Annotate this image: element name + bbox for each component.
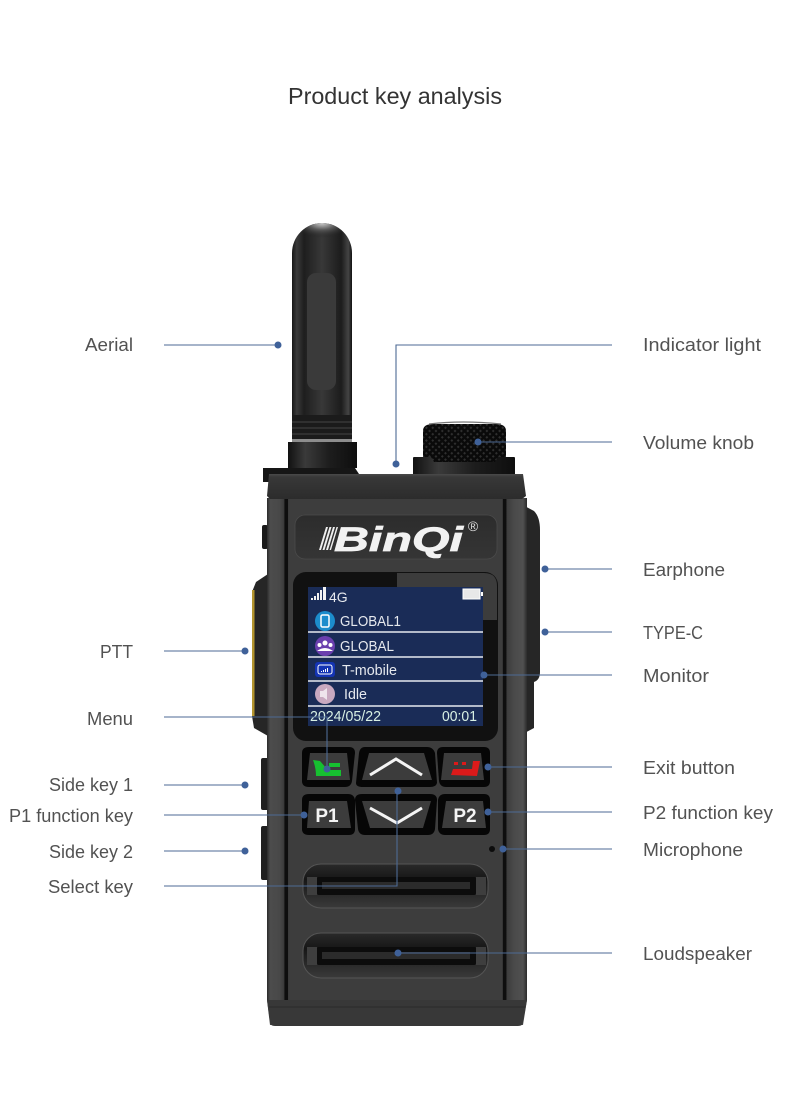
logo plate: ® — [468, 518, 479, 534]
row: GLOBAL — [315, 636, 394, 656]
callout: Loudspeaker: Loudspeaker — [643, 944, 752, 964]
callout: Select key: Select key — [48, 877, 133, 897]
callout: Microphone: Microphone — [643, 840, 743, 860]
callout: Side key 1: Side key 1 — [49, 775, 133, 795]
callout: Volume knob: Volume knob — [643, 433, 754, 453]
callout: Exit button — [484, 758, 735, 778]
callout: Select key — [48, 788, 402, 897]
callout: P2 function key — [484, 803, 773, 823]
bottom cap — [267, 1000, 527, 1026]
body — [267, 498, 527, 1025]
P1 key: P1 — [315, 806, 339, 827]
row: GLOBAL: GLOBAL — [340, 639, 394, 655]
callout: TYPE-C: TYPE-C — [643, 623, 703, 643]
callout: P2 function key: P2 function key — [643, 803, 773, 823]
callout: Menu — [87, 709, 330, 772]
status bar — [311, 587, 483, 605]
down key — [355, 794, 437, 835]
row: T-mobile: T-mobile — [342, 663, 397, 679]
row: Idle: Idle — [344, 687, 367, 703]
callout: Earphone — [542, 560, 725, 580]
microphone hole — [489, 846, 495, 852]
keypad — [302, 747, 490, 835]
callout: Loudspeaker — [394, 944, 752, 964]
callout: TYPE-C — [542, 623, 703, 643]
lower speaker slot — [303, 933, 488, 978]
callout: PTT: PTT — [100, 642, 133, 662]
status bar: 4G — [329, 589, 348, 605]
green call key — [302, 747, 355, 787]
right side cover — [519, 503, 540, 736]
date and time — [310, 709, 477, 725]
top cap — [267, 474, 526, 499]
aerial — [263, 223, 359, 482]
callout: Aerial — [85, 335, 282, 355]
row: Idle — [315, 684, 367, 704]
callout: Earphone: Earphone — [643, 560, 725, 580]
callout: Side key 1 — [49, 775, 248, 795]
P2 key — [438, 794, 490, 835]
callout: Volume knob — [474, 433, 754, 453]
callout: Side key 2: Side key 2 — [49, 842, 133, 862]
callout: Exit button: Exit button — [643, 758, 735, 778]
logo plate — [295, 515, 497, 559]
P2 key: P2 — [453, 806, 477, 827]
row: GLOBAL1: GLOBAL1 — [340, 614, 401, 630]
title: Product key analysis — [288, 83, 502, 109]
callout: Side key 2 — [49, 842, 248, 862]
side keys 1 and 2 — [261, 758, 269, 880]
upper speaker slot — [303, 864, 488, 908]
PTT side key — [252, 525, 268, 736]
callout: Monitor: Monitor — [643, 666, 709, 686]
callout: Indicator light: Indicator light — [643, 335, 761, 355]
callout: Indicator light — [392, 335, 761, 468]
brand name: BinQi — [334, 521, 465, 559]
callout: Microphone — [500, 840, 743, 860]
radio product illustration — [252, 223, 540, 1026]
monitor screen — [293, 572, 498, 741]
row: GLOBAL1 — [315, 611, 401, 631]
callout: P1 function key — [9, 806, 308, 826]
callout: P1 function key: P1 function key — [9, 806, 133, 826]
row: T-mobile — [315, 662, 397, 679]
date and time: 2024/05/22 — [310, 709, 381, 725]
volume knob — [413, 422, 515, 475]
date and time: 00:01 — [442, 709, 477, 725]
callout: Menu: Menu — [87, 709, 133, 729]
callout: PTT — [100, 642, 248, 662]
callout: Monitor — [480, 666, 709, 686]
P1 key — [302, 794, 355, 835]
red exit key — [437, 747, 490, 787]
up key — [356, 747, 437, 787]
callout: Aerial: Aerial — [85, 335, 133, 355]
